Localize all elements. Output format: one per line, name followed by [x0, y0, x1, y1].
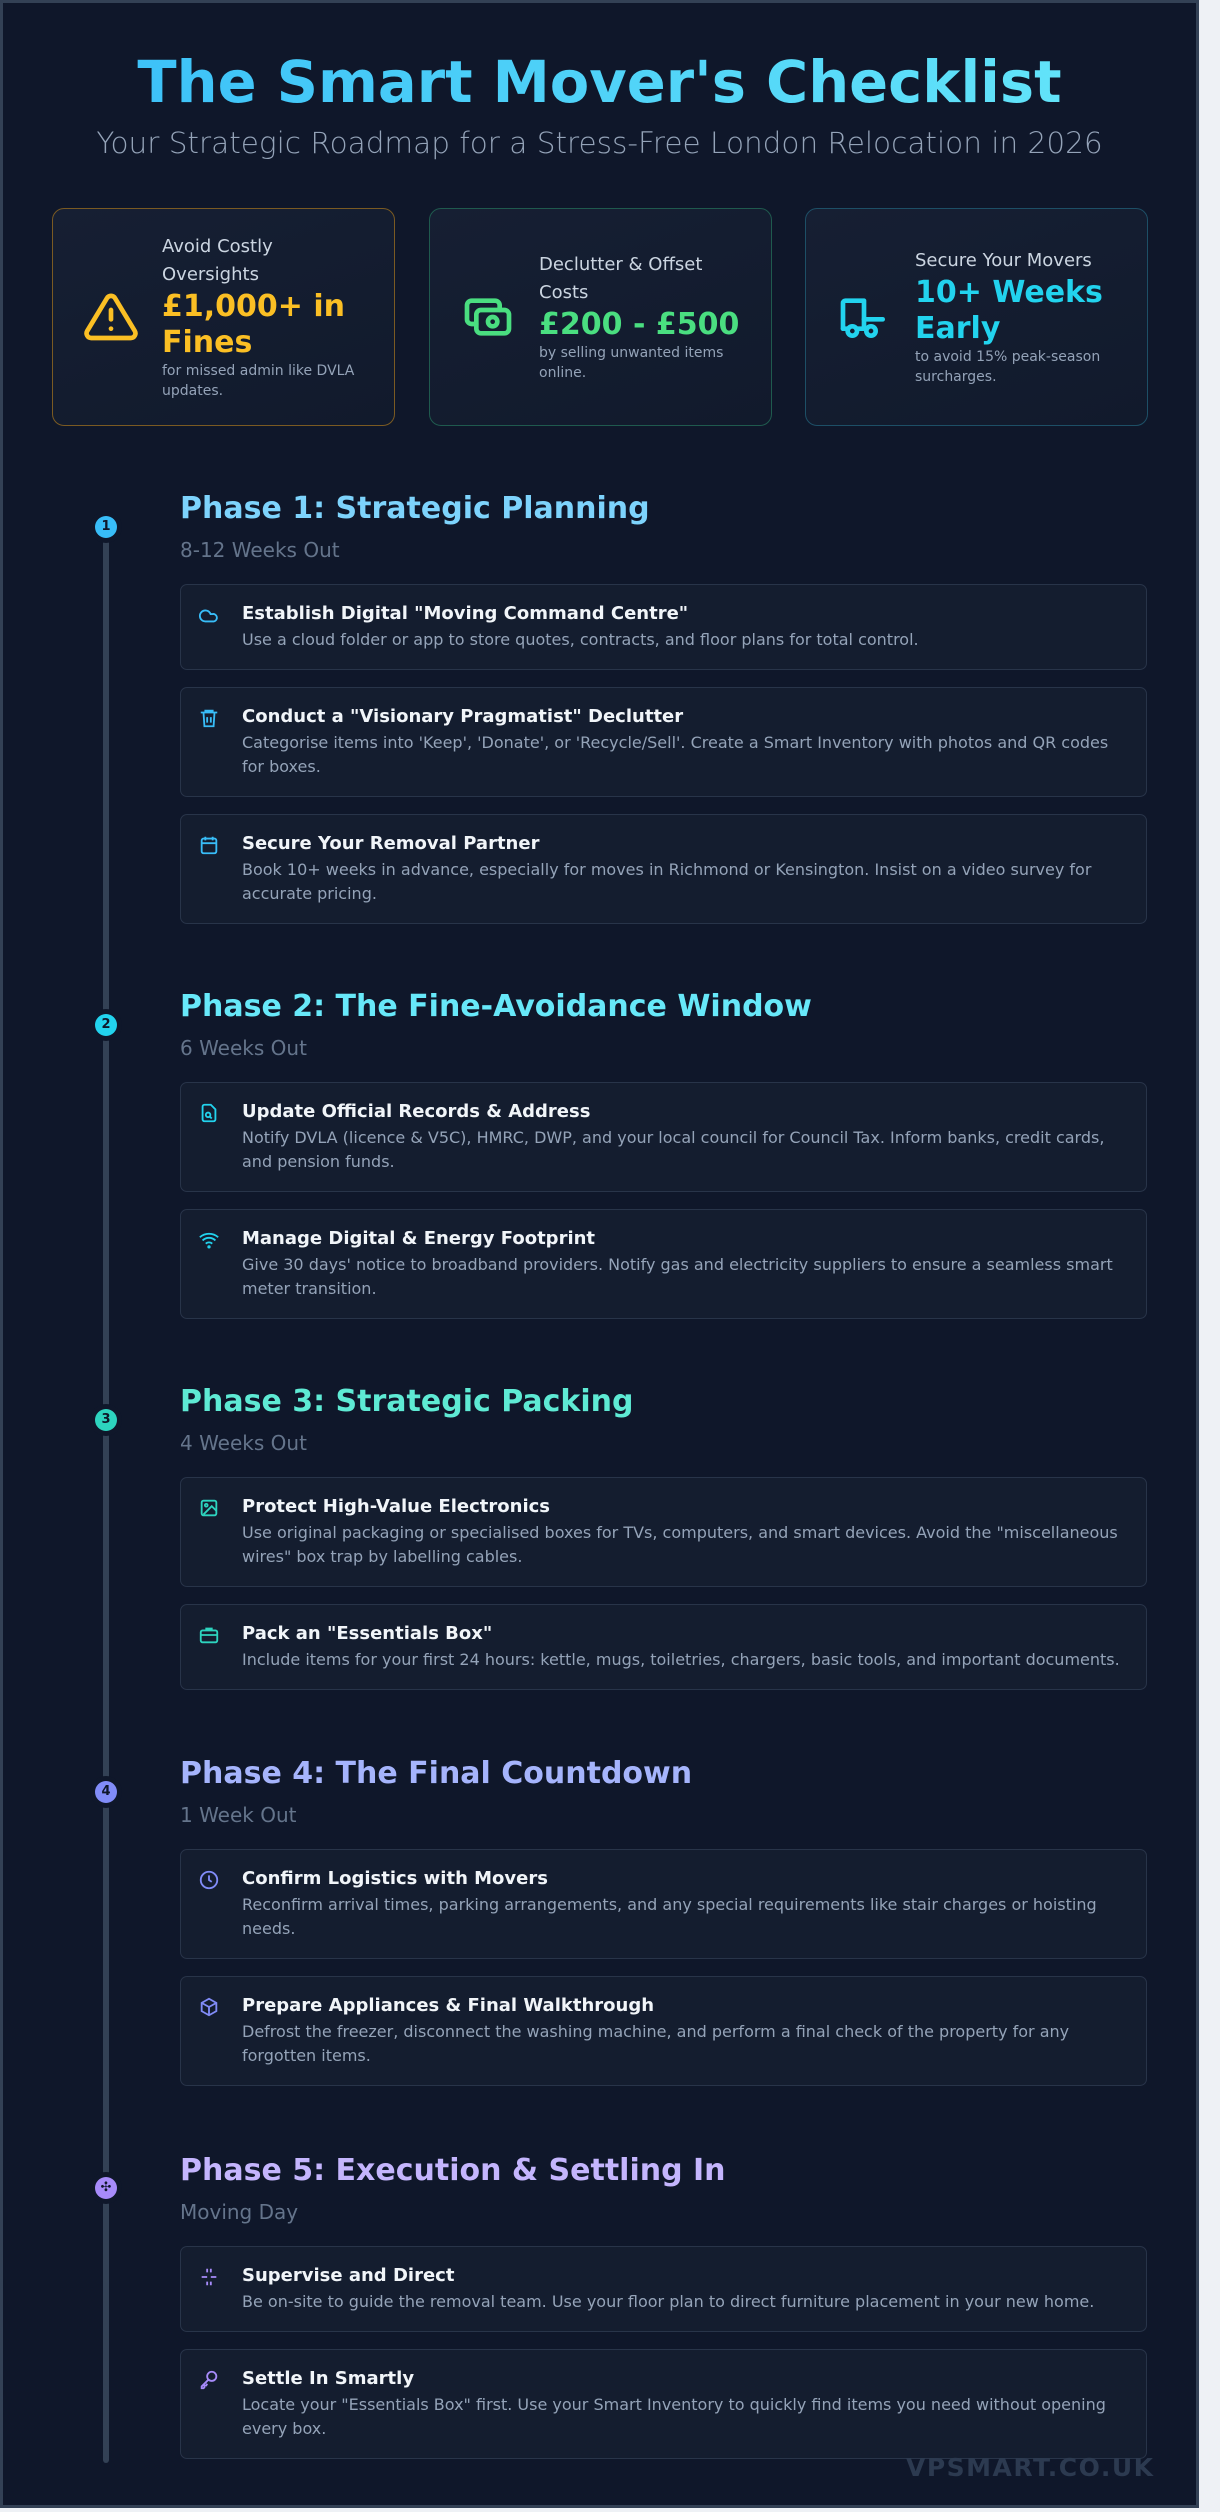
title [3, 43, 1196, 123]
phase 2: 6 Weeks Out [180, 1036, 307, 1060]
card: supervise [180, 2246, 1147, 2332]
card: records [180, 1082, 1147, 1192]
card: digital footprint: Give 30 days' notice to broadband providers. Notify gas and electricity suppliers to ensure a seamless smart meter transition. [242, 1255, 1113, 1298]
icon: warning [84, 294, 138, 340]
phase 2 [180, 989, 1147, 1319]
card: declutter [180, 687, 1147, 797]
stat card: declutter: by selling unwanted items online. [539, 345, 723, 381]
card: electronics [180, 1477, 1147, 1587]
phase 3 [180, 1384, 1147, 1690]
card: logistics: Confirm Logistics with Movers [242, 1868, 548, 1889]
heading: Phase 3: Strategic Packing [180, 1384, 634, 1419]
card: digital footprint [180, 1209, 1147, 1319]
icon: truck [840, 298, 885, 338]
stat card: movers: to avoid 15% peak-season surcharges. [915, 349, 1100, 385]
subtitle: Your Strategic Roadmap for a Stress-Free London Relocation in 2026 [96, 126, 1103, 160]
card: appliances: Prepare Appliances & Final Walkthrough [242, 1995, 654, 2016]
title: The Smart Mover's Checklist [137, 49, 1062, 116]
card: command centre: Establish Digital "Moving Command Centre" [242, 603, 688, 624]
dot: phase 2 [95, 1014, 117, 1036]
dot: phase 1: 1 [101, 519, 111, 534]
card: removal partner [180, 814, 1147, 924]
card: settle in [180, 2349, 1147, 2459]
phase 4 [180, 1756, 1147, 2086]
icon: money [464, 298, 512, 336]
card: logistics: Reconfirm arrival times, parking arrangements, and any special requirements like stair charges or hoisting needs. [242, 1895, 1097, 1938]
stat card: fines: for missed admin like DVLA updates. [162, 363, 354, 399]
card: essentials box: Include items for your first 24 hours: kettle, mugs, toiletries, chargers, basic tools, and important documents. [242, 1650, 1120, 1669]
card: declutter: Categorise items into 'Keep', 'Donate', or 'Recycle/Sell'. Create a Smart Inventory with photos and QR codes for boxes. [242, 733, 1108, 776]
stat card: movers: Secure Your Movers [915, 250, 1092, 271]
card: command centre: Use a cloud folder or app to store quotes, contracts, and floor plans for total control. [242, 630, 919, 649]
card: removal partner: Book 10+ weeks in advance, especially for moves in Richmond or Kensington. Insist on a video survey for accurate pricing. [242, 860, 1091, 903]
heading: Phase 5: Execution & Settling In [180, 2153, 726, 2188]
watermark: VPSMART.CO.UK [906, 2453, 1155, 2482]
card: electronics: Use original packaging or specialised boxes for TVs, computers, and smart devices. Avoid the "miscellaneous wires" box trap by labelling cables. [242, 1523, 1118, 1566]
dot: phase 3 [95, 1409, 117, 1431]
card: records: Notify DVLA (licence & V5C), HMRC, DWP, and your local council for Council Tax. Inform banks, credit cards, and pension funds. [242, 1128, 1104, 1171]
card: logistics [180, 1849, 1147, 1959]
stat card: declutter [429, 208, 772, 426]
card: removal partner: Secure Your Removal Partner [242, 833, 539, 854]
timeline line [103, 515, 109, 2463]
card: digital footprint: Manage Digital & Energy Footprint [242, 1228, 595, 1249]
stat card: declutter: £200 - £500 [539, 307, 739, 342]
stat card: movers [805, 208, 1148, 426]
card: appliances [180, 1976, 1147, 2086]
card: settle in: Settle In Smartly [242, 2368, 414, 2389]
phase 3: 4 Weeks Out [180, 1431, 307, 1455]
dot: phase 5: ✣ [101, 2180, 111, 2195]
card: supervise: Be on-site to guide the removal team. Use your floor plan to direct furniture placement in your new home. [242, 2292, 1094, 2311]
phase 5: Moving Day [180, 2200, 298, 2224]
card: command centre [180, 584, 1147, 670]
dot: phase 3: 3 [101, 1412, 111, 1427]
card: electronics: Protect High-Value Electronics [242, 1496, 550, 1517]
heading: Phase 1: Strategic Planning [180, 491, 650, 526]
stat card: fines: Avoid Costly Oversights [162, 236, 273, 285]
heading: Phase 2: The Fine-Avoidance Window [180, 989, 812, 1024]
dot: phase 5 [95, 2177, 117, 2199]
card: appliances: Defrost the freezer, disconnect the washing machine, and perform a final check of the property for any forgotten items. [242, 2022, 1069, 2065]
dot: phase 4: 4 [101, 1784, 111, 1799]
dot: phase 2: 2 [101, 1017, 111, 1032]
stat card: fines: £1,000+ in Fines [162, 289, 345, 360]
card: essentials box [180, 1604, 1147, 1690]
card: declutter: Conduct a "Visionary Pragmatist" Declutter [242, 706, 683, 727]
dot: phase 4 [95, 1781, 117, 1803]
stat card: fines [52, 208, 395, 426]
phase 1 [180, 491, 1147, 924]
dot: phase 1 [95, 516, 117, 538]
card: essentials box: Pack an "Essentials Box" [242, 1623, 492, 1644]
phase 4: 1 Week Out [180, 1803, 296, 1827]
phase 5 [180, 2153, 1147, 2459]
card: supervise: Supervise and Direct [242, 2265, 454, 2286]
phase 1: 8-12 Weeks Out [180, 538, 340, 562]
card: settle in: Locate your "Essentials Box" first. Use your Smart Inventory to quickly find items you need without opening every box. [242, 2395, 1106, 2438]
stat card: movers: 10+ Weeks Early [915, 275, 1103, 346]
card: records: Update Official Records & Address [242, 1101, 590, 1122]
stat card: declutter: Declutter & Offset Costs [539, 254, 702, 303]
heading: Phase 4: The Final Countdown [180, 1756, 692, 1791]
